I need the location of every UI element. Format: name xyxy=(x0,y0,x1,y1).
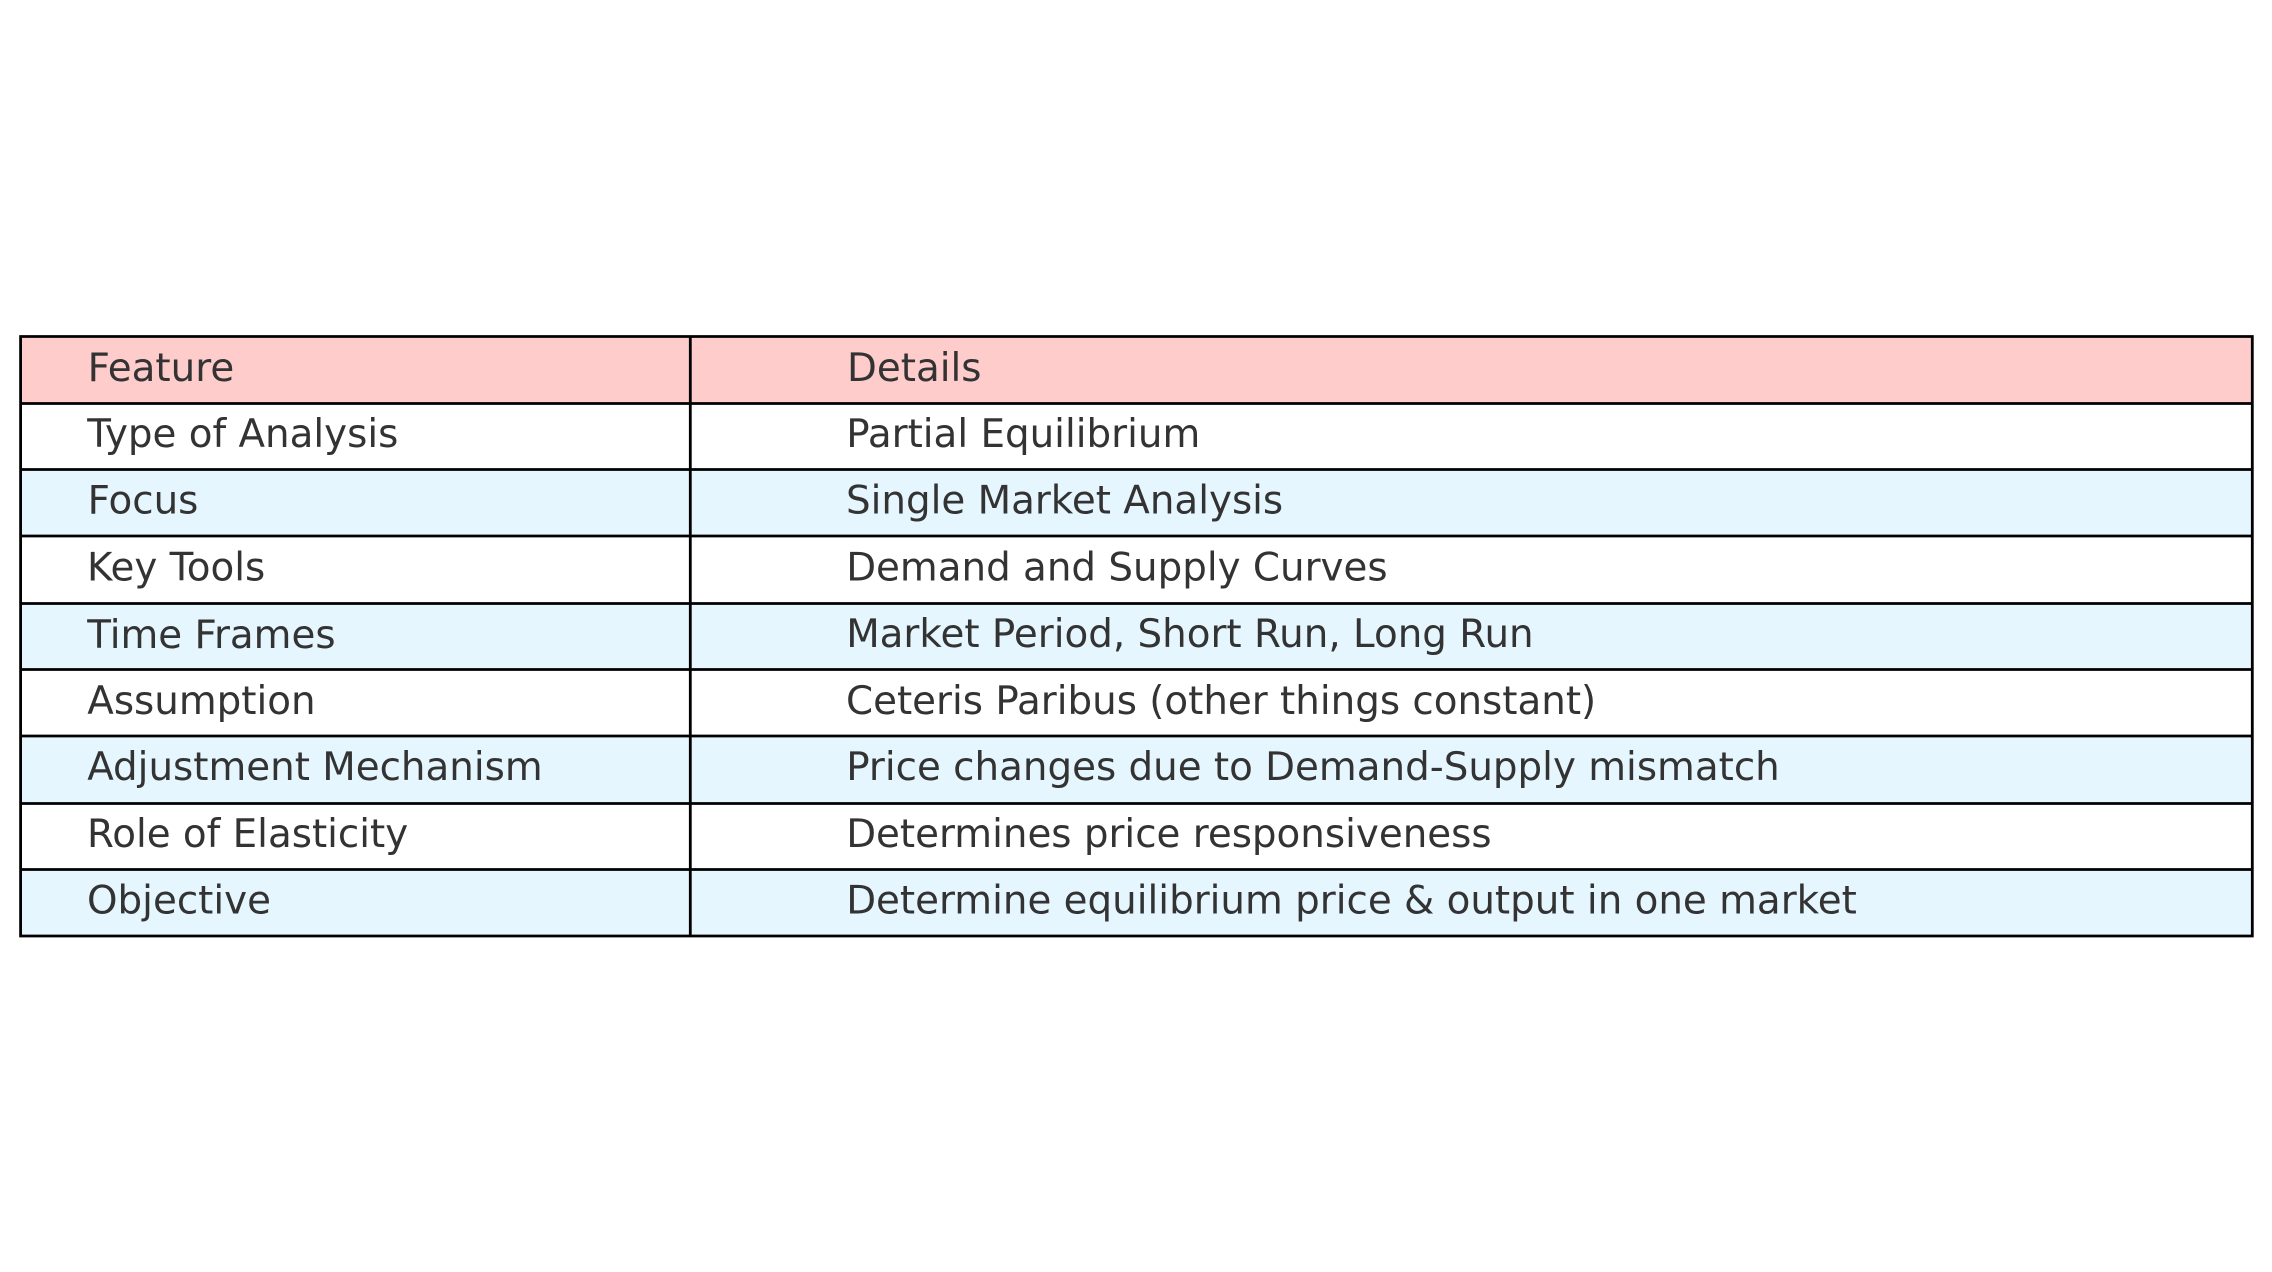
header row: Details xyxy=(847,346,982,391)
row: type of analysis xyxy=(21,404,2252,470)
row: key tools: Key Tools xyxy=(87,546,265,590)
row: time frames: Market Period, Short Run, Long Run xyxy=(846,612,1534,657)
row: adjustment mechanism: Adjustment Mechanism xyxy=(87,745,543,790)
row: key tools xyxy=(21,536,2252,604)
row: time frames xyxy=(21,604,2252,670)
row: focus: Single Market Analysis xyxy=(846,478,1283,524)
row: objective: Determine equilibrium price & output in one market xyxy=(846,879,1857,924)
row: adjustment mechanism: Price changes due to Demand-Supply mismatch xyxy=(846,745,1780,790)
row: role of elasticity: Determines price responsiveness xyxy=(846,812,1492,857)
row: type of analysis: Partial Equilibrium xyxy=(846,412,1200,457)
row: assumption xyxy=(21,670,2252,736)
row: objective xyxy=(21,870,2252,936)
row: objective: Objective xyxy=(87,879,271,924)
row: focus xyxy=(21,470,2252,536)
header row: Feature xyxy=(88,346,234,391)
row: key tools: Demand and Supply Curves xyxy=(846,546,1388,590)
row: focus: Focus xyxy=(88,478,198,524)
row: assumption: Assumption xyxy=(87,679,316,724)
header row xyxy=(21,336,2252,404)
row: type of analysis: Type of Analysis xyxy=(86,412,398,457)
row: role of elasticity: Role of Elasticity xyxy=(87,812,408,857)
row: role of elasticity xyxy=(21,804,2252,870)
row: adjustment mechanism xyxy=(21,736,2252,804)
row: time frames: Time Frames xyxy=(86,613,336,658)
table grid lines xyxy=(21,336,2252,936)
row: assumption: Ceteris Paribus (other things constant) xyxy=(846,679,1596,724)
